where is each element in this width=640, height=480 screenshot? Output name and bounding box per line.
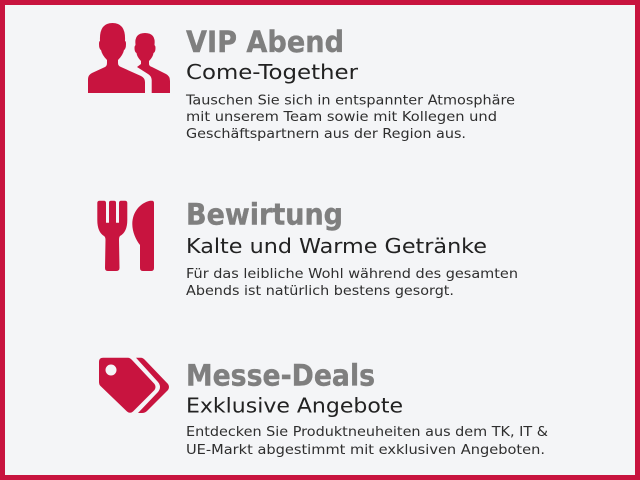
body text: Messe-Deals: UE-Markt abgestimmt mit exklusiven Angeboten. [186, 442, 545, 458]
icon: fork and knife [97, 201, 154, 271]
body text: VIP Abend: mit unserem Team sowie mit Kollegen und [186, 109, 497, 125]
section: VIP Abend [88, 23, 515, 142]
subheading: Exklusive Angebote: Exklusive Angebote [186, 394, 403, 418]
subheading: Come-Together: Come-Together [186, 60, 359, 84]
icon: price tags [99, 358, 169, 413]
body text: VIP Abend: Tauschen Sie sich in entspannter Atmosphäre [185, 92, 515, 108]
heading: Bewirtung: Bewirtung [186, 198, 343, 232]
section: Bewirtung [97, 198, 518, 299]
heading: VIP Abend: VIP Abend [186, 25, 344, 59]
heading: Messe-Deals: Messe-Deals [186, 358, 375, 392]
body text: Messe-Deals [186, 424, 548, 458]
body text: Bewirtung: Abends ist natürlich bestens gesorgt. [186, 283, 454, 299]
section: Messe-Deals [99, 358, 548, 458]
icon: two people [88, 23, 170, 93]
subheading: Kalte und Warme Getränke: Kalte und Warme Getränke [186, 234, 487, 258]
body text: VIP Abend: Geschäftspartnern aus der Region aus. [186, 126, 466, 142]
body text: VIP Abend [185, 92, 515, 142]
body text: Bewirtung [186, 266, 518, 299]
body text: Messe-Deals: Entdecken Sie Produktneuheiten aus dem TK, IT & [186, 424, 548, 440]
body text: Bewirtung: Für das leibliche Wohl während des gesamten [186, 266, 518, 282]
